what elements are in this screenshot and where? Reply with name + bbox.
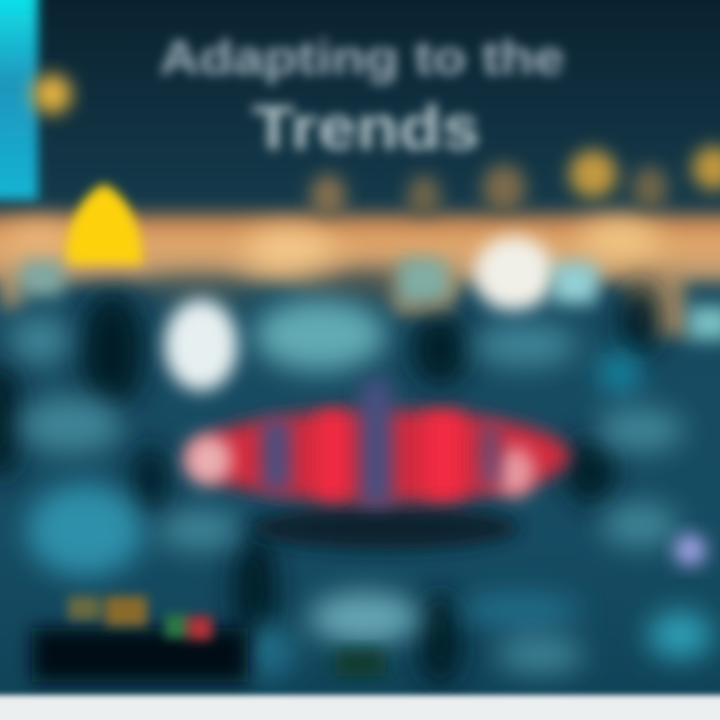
panels: teal data cards bbox=[10, 299, 712, 676]
icon: white oval bbox=[164, 299, 238, 391]
band highlights bbox=[5, 220, 660, 298]
icons: dark shadow shapes bbox=[0, 282, 660, 688]
legend: dark box with coloured marks bbox=[32, 596, 248, 682]
icon: yellow bell bbox=[66, 184, 142, 264]
legend background bbox=[32, 628, 248, 682]
red platform bbox=[190, 410, 570, 502]
footer strip bbox=[0, 695, 720, 720]
platform shadow bbox=[250, 506, 520, 550]
title bbox=[160, 32, 564, 163]
title: Adapting to the bbox=[160, 32, 564, 85]
icons: row of figures above the band bbox=[310, 146, 720, 218]
icons: pale teal blobs under band bbox=[20, 258, 720, 340]
icon: dark green spot bbox=[335, 650, 385, 676]
panel: orange horizon band bbox=[0, 214, 720, 335]
legend marks bbox=[68, 596, 212, 640]
figures on platform bbox=[262, 380, 500, 505]
panel: cyan side strip bbox=[0, 0, 38, 200]
icon: small gold circle bbox=[32, 74, 72, 114]
title: Trends bbox=[252, 94, 480, 163]
icon: white circle on band bbox=[474, 236, 554, 312]
chart: red elliptical platform bbox=[184, 380, 570, 550]
icon: lilac spot bbox=[674, 534, 706, 566]
platform highlights bbox=[184, 412, 535, 498]
